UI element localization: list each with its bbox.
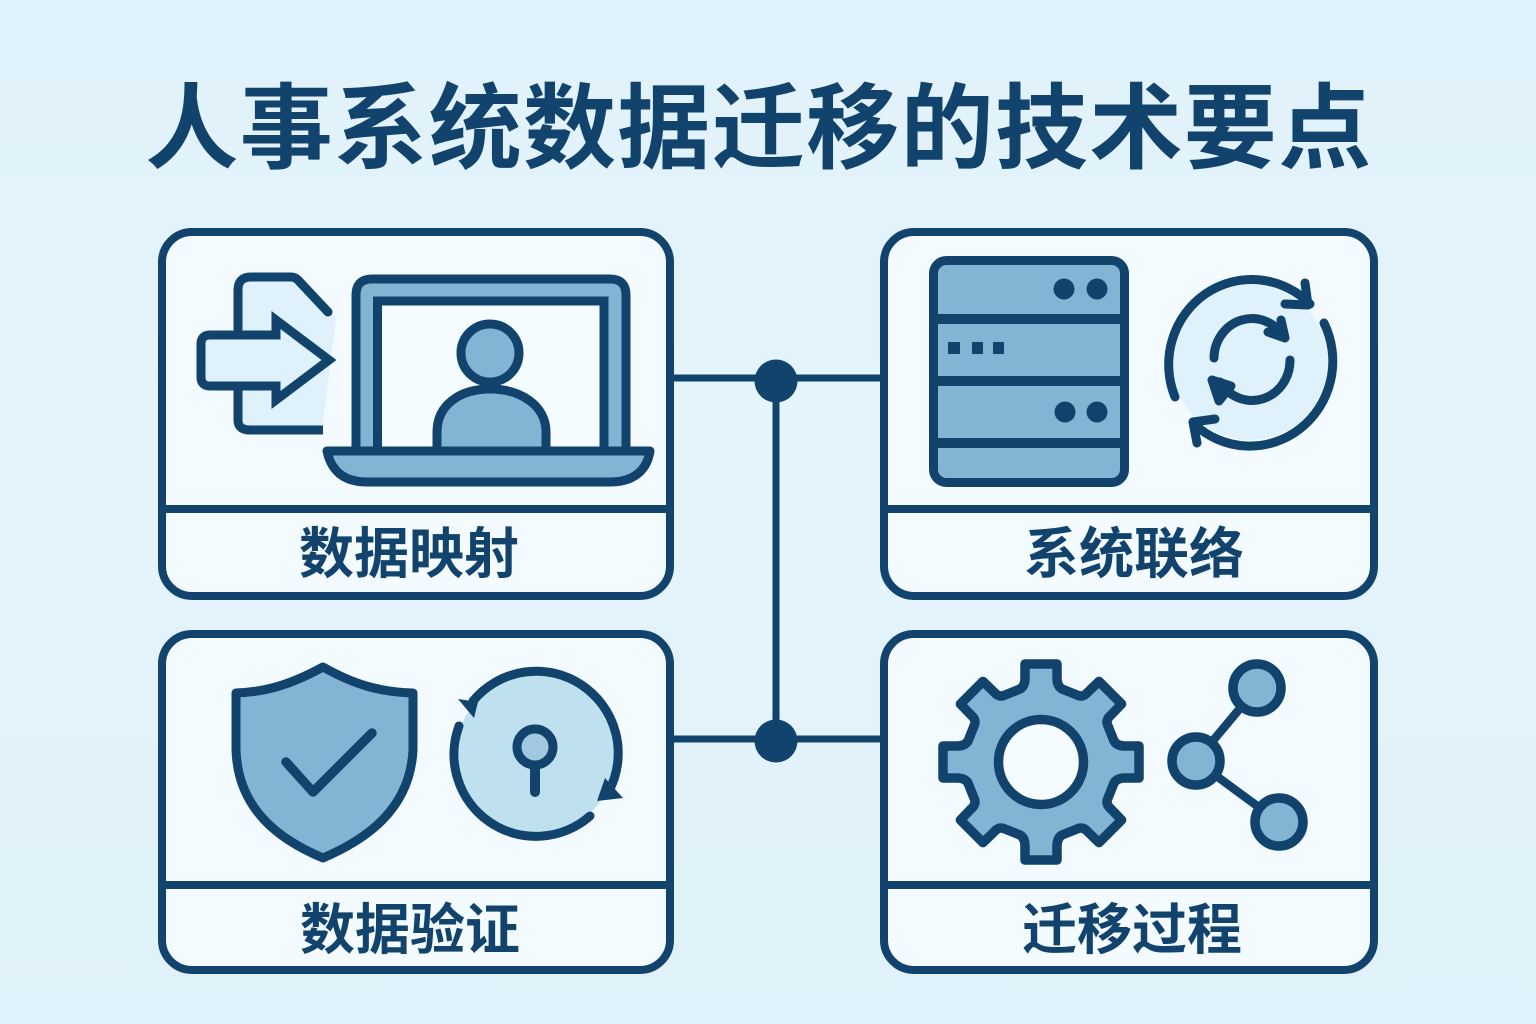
icon: server bbox=[933, 260, 1125, 482]
title: 人事系统数据迁移的技术要点 bbox=[145, 77, 1373, 181]
icon: network nodes bbox=[1172, 664, 1303, 846]
icon: laptop with person bbox=[327, 279, 650, 482]
icon: gear bbox=[943, 664, 1139, 860]
panel: data mapping bbox=[162, 232, 670, 596]
icon: key circle bbox=[454, 671, 623, 836]
connector lines bbox=[672, 360, 882, 762]
label: system integration: 系统联络 bbox=[1024, 523, 1244, 585]
label: migration process: 迁移过程 bbox=[1022, 899, 1242, 961]
panel: data validation bbox=[162, 634, 670, 970]
panel: migration process bbox=[884, 634, 1374, 970]
icon: shield with check bbox=[236, 667, 413, 858]
panel: system integration bbox=[884, 232, 1374, 596]
label: data mapping: 数据映射 bbox=[299, 523, 519, 585]
icon: document with arrow bbox=[201, 277, 336, 430]
icon: sync arrows bbox=[1169, 279, 1333, 446]
label: data validation: 数据验证 bbox=[300, 899, 520, 961]
